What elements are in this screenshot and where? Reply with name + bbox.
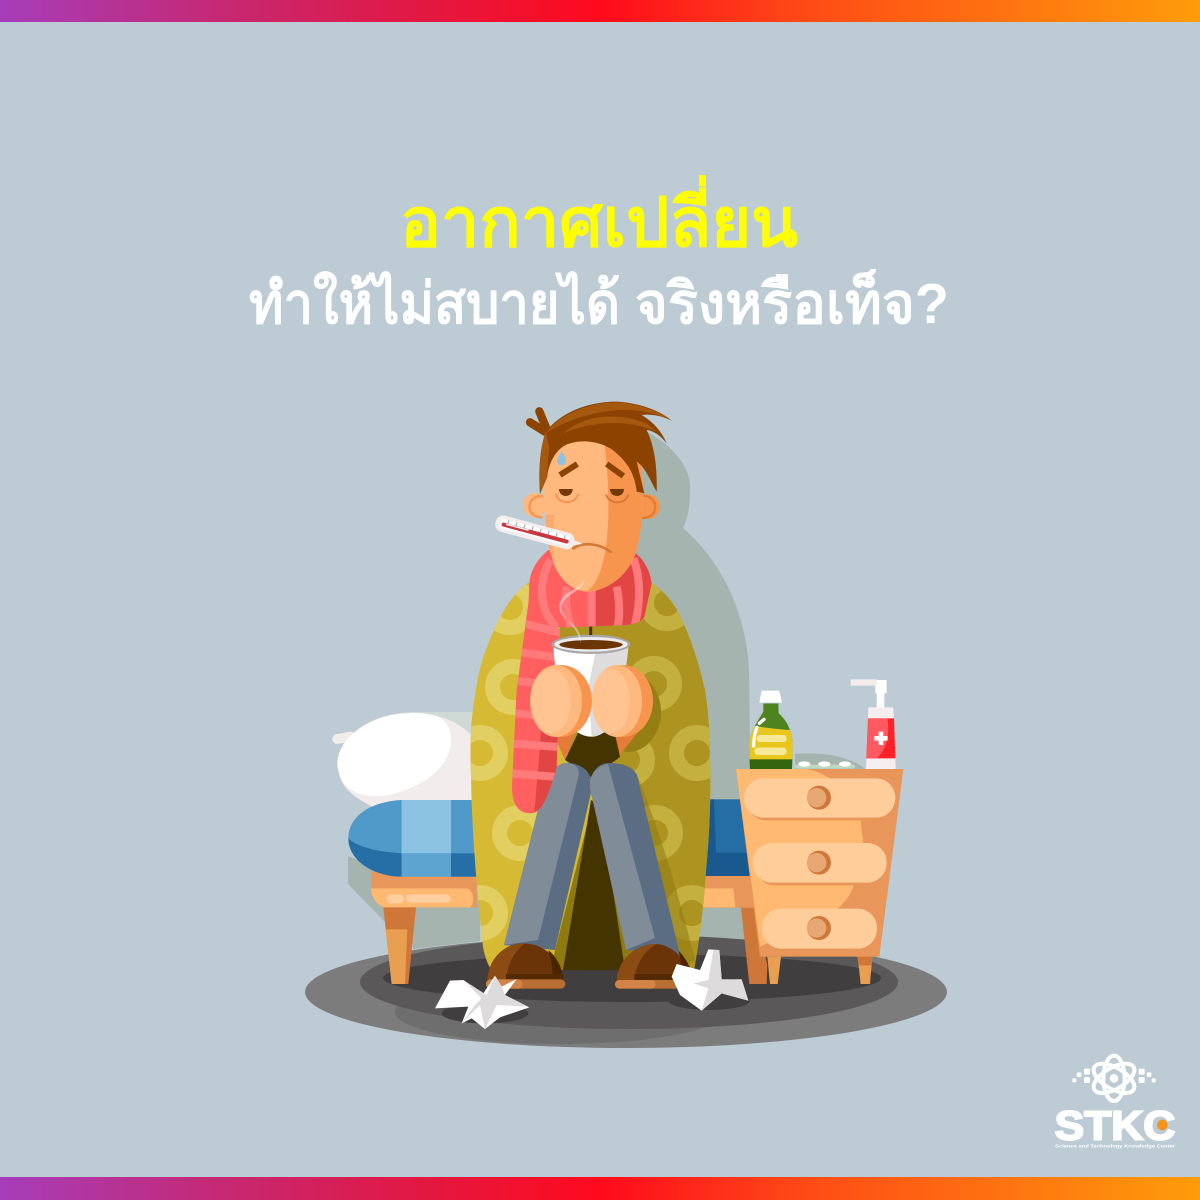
legs	[504, 763, 680, 955]
left hand	[530, 665, 592, 737]
drawer 1	[744, 778, 895, 818]
logo wordmark: STKC	[1055, 1103, 1175, 1149]
pillow	[337, 713, 477, 807]
steam	[559, 577, 586, 643]
chest opening	[565, 733, 620, 778]
left tissue	[435, 976, 529, 1029]
title line 2 right phrase: จริงหรือเท็จ?	[635, 268, 949, 336]
right hand	[592, 665, 653, 737]
atom mark	[1089, 1056, 1139, 1101]
drawer 2	[753, 843, 887, 883]
right tissue	[669, 949, 750, 1011]
inner fold of blanket	[554, 826, 634, 970]
scarf	[507, 547, 655, 817]
right ear	[635, 494, 660, 519]
head and scarf	[494, 402, 672, 817]
STKC logo	[1055, 1056, 1175, 1150]
green medicine bottle	[747, 691, 795, 769]
left leg	[504, 763, 592, 950]
left ear	[523, 493, 547, 517]
blanket rings left	[470, 584, 538, 941]
bed	[337, 713, 477, 984]
right slipper	[615, 944, 695, 989]
top gradient bar	[0, 0, 1200, 22]
logo dots	[1072, 1069, 1156, 1083]
cup	[552, 635, 630, 737]
bottom gradient bar	[0, 1177, 1200, 1200]
dresser	[736, 769, 903, 984]
logo tagline: Science and Technology Knowledge Center	[1055, 1144, 1175, 1150]
mattress left	[348, 800, 477, 877]
mouth	[573, 544, 611, 552]
eyebrows	[560, 464, 623, 476]
blanket rings right	[606, 582, 718, 934]
thermometer	[494, 514, 584, 553]
spray bottle	[851, 679, 896, 769]
logo orange dot	[1157, 1120, 1168, 1130]
bed frame and leg	[371, 872, 477, 984]
man	[460, 402, 720, 989]
hand shadow on blanket	[604, 680, 661, 752]
hair	[530, 402, 672, 494]
hands	[530, 665, 653, 737]
furniture and props	[736, 679, 903, 984]
title line 1: อากาศเปลี่ยน	[400, 174, 798, 261]
left slipper	[486, 943, 565, 989]
title	[249, 174, 949, 336]
title line 2 left phrase: ทำให้ไม่สบายได้	[249, 270, 620, 336]
right leg	[590, 763, 680, 955]
scarf collar	[528, 550, 652, 628]
face	[544, 437, 643, 592]
dresser legs	[767, 957, 872, 984]
pill blister tray	[795, 761, 855, 769]
bed right part	[700, 799, 767, 984]
drawer 3	[762, 909, 877, 949]
sleeve cuffs	[554, 732, 638, 760]
blanket	[470, 583, 710, 970]
floor rug	[305, 935, 947, 1048]
sweat drop	[557, 451, 566, 465]
wall shadow of man and furniture	[348, 432, 866, 949]
scarf tail	[512, 604, 560, 814]
eyes	[556, 489, 628, 502]
